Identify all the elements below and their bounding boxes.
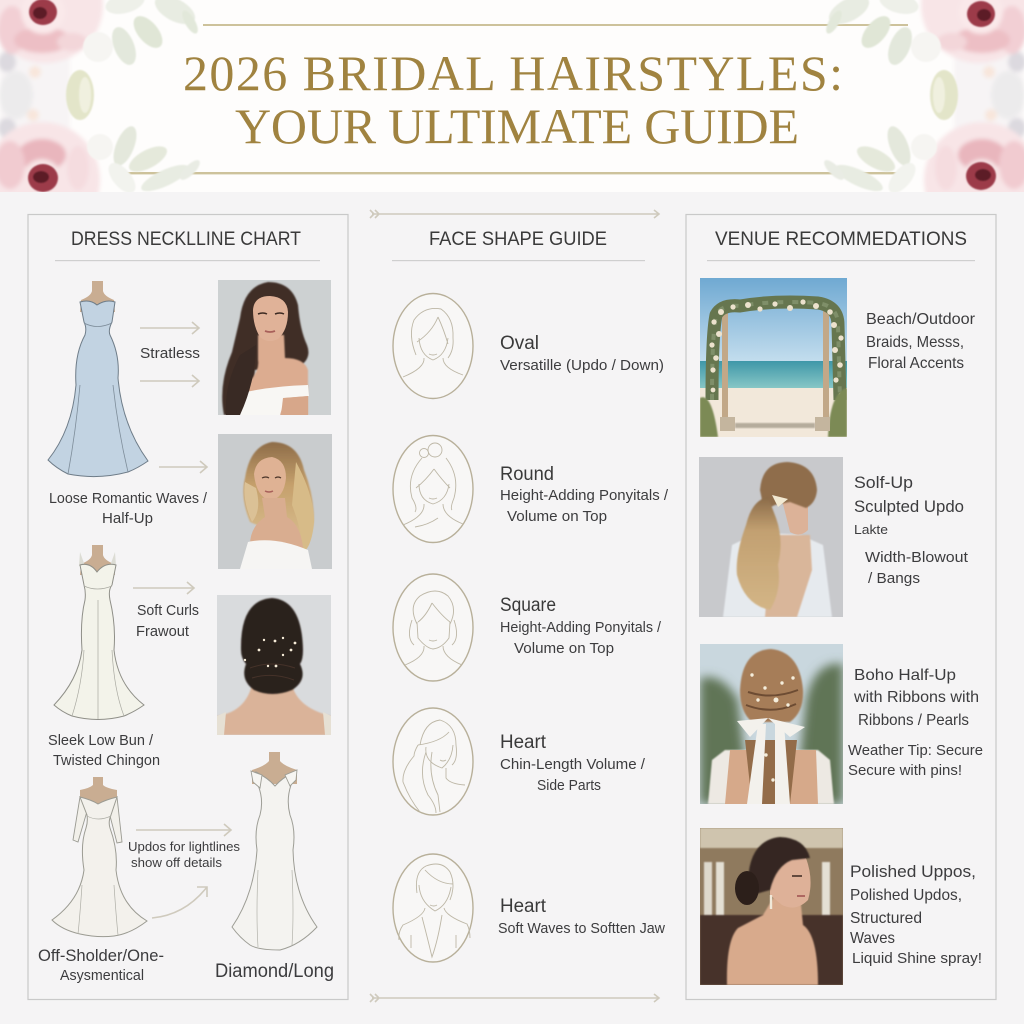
label: beach outdoor bbox=[866, 311, 976, 372]
label: beach outdoor: Beach/Outdoor bbox=[866, 311, 976, 328]
label: soft updo: Width-Blowout bbox=[865, 549, 969, 566]
label: soft curls bbox=[136, 602, 199, 640]
title: 2026 BRIDAL HAIRSTYLES: bbox=[183, 45, 843, 101]
label: round: Round bbox=[500, 464, 554, 485]
label: heart bbox=[500, 732, 646, 794]
dress: blue strapless bbox=[48, 281, 148, 477]
label: boho half-up: Boho Half-Up bbox=[854, 667, 956, 684]
label: sleek low bun: Sleek Low Bun / bbox=[48, 732, 154, 749]
label: off-shoulder: Off-Sholder/One- bbox=[38, 946, 164, 965]
label: square: Volume on Top bbox=[514, 640, 614, 657]
arrow: curved bbox=[152, 887, 207, 918]
arrow: bottom connector bbox=[370, 994, 659, 1002]
label: heart: Chin-Length Volume / bbox=[500, 756, 646, 773]
label: updos for necklines bbox=[128, 839, 241, 870]
label: heart: Heart bbox=[500, 732, 547, 753]
arrow bbox=[140, 322, 199, 334]
panel: face shape guide bbox=[392, 229, 669, 962]
label: oval: Oval bbox=[500, 333, 539, 354]
label: loose romantic waves: Loose Romantic Waves / bbox=[49, 490, 208, 507]
title: YOUR ULTIMATE GUIDE bbox=[235, 98, 799, 154]
label: soft updo bbox=[854, 473, 969, 587]
label: round: Volume on Top bbox=[507, 508, 607, 525]
label: boho half-up bbox=[848, 667, 983, 779]
label: oval bbox=[500, 333, 664, 374]
label: soft curls: Soft Curls bbox=[137, 602, 199, 619]
label: heart: Side Parts bbox=[537, 777, 601, 794]
label: square bbox=[500, 595, 662, 657]
panel: venue recommendations bbox=[686, 214, 996, 1000]
arrow: top connector bbox=[370, 210, 659, 218]
label: polished updos: Polished Uppos, bbox=[850, 862, 976, 881]
label: polished updos: Waves bbox=[850, 930, 895, 947]
photo: dark low bun bbox=[217, 595, 331, 735]
floral corner: left bbox=[0, 0, 200, 192]
label: soft updo: Sculpted Updo bbox=[854, 497, 964, 516]
label: updos for necklines: show off details bbox=[131, 855, 223, 870]
heading: dress neckline chart: DRESS NECKLLINE CHART bbox=[71, 229, 301, 250]
label: beach outdoor: Floral Accents bbox=[868, 355, 964, 372]
icon: round face bbox=[393, 436, 473, 542]
icon: heart face bbox=[393, 708, 473, 815]
dress: off-shoulder long sleeve bbox=[52, 777, 147, 937]
label: updos for necklines: Updos for lightlines bbox=[128, 839, 241, 854]
photo: blonde waves bbox=[218, 434, 332, 569]
dress: sweetheart straps bbox=[54, 545, 144, 720]
icon: square face bbox=[393, 574, 473, 681]
label: soft updo: Solf-Up bbox=[854, 473, 913, 492]
photo: ponytail bbox=[699, 457, 843, 617]
label: polished updos: Polished Updos, bbox=[850, 887, 962, 904]
arrow bbox=[133, 582, 194, 594]
icon: diamond face bbox=[393, 854, 473, 962]
label: soft curls: Frawout bbox=[136, 623, 190, 640]
label: polished updos: Liquid Shine spray! bbox=[852, 950, 982, 967]
title bbox=[185, 57, 839, 144]
label: off-shoulder: Asysmentical bbox=[60, 967, 144, 984]
heading: venue recommendations: VENUE RECOMMEDATIONS bbox=[715, 229, 967, 250]
photo: dark waves bbox=[218, 280, 331, 415]
label: sleek low bun bbox=[48, 732, 160, 769]
arrow bbox=[136, 824, 231, 836]
gold rule bottom bbox=[124, 172, 905, 174]
dress: off-shoulder gown bbox=[232, 752, 317, 950]
label: loose romantic waves: Half-Up bbox=[102, 510, 153, 527]
label: soft updo: Lakte bbox=[854, 522, 888, 537]
label: strapless: Stratless bbox=[140, 345, 200, 362]
label: soft updo: / Bangs bbox=[868, 570, 920, 587]
arrow bbox=[159, 461, 207, 473]
label: heart soft waves bbox=[498, 896, 665, 937]
gold rule top bbox=[203, 24, 908, 26]
label: polished updos: Structured bbox=[850, 910, 922, 927]
floral corner: right bbox=[824, 0, 1024, 192]
label: sleek low bun: Twisted Chingon bbox=[53, 752, 160, 769]
photo: polished updo bbox=[700, 828, 843, 985]
label: boho half-up: Weather Tip: Secure bbox=[848, 742, 983, 759]
label: boho half-up: Ribbons / Pearls bbox=[858, 712, 969, 729]
label: off-shoulder bbox=[38, 946, 164, 984]
label: heart soft waves: Heart bbox=[500, 896, 547, 917]
label: round bbox=[500, 464, 669, 525]
label: beach outdoor: Braids, Messs, bbox=[866, 334, 964, 351]
label: loose romantic waves bbox=[49, 490, 208, 527]
label: diamond/long: Diamond/Long bbox=[215, 961, 334, 982]
photo: boho half-up bbox=[700, 644, 843, 804]
arrow bbox=[140, 375, 199, 387]
label: boho half-up: with Ribbons with bbox=[853, 689, 979, 706]
label: oval: Versatille (Updo / Down) bbox=[500, 357, 664, 374]
label: round: Height-Adding Ponyitals / bbox=[500, 487, 669, 504]
label: square: Height-Adding Ponyitals / bbox=[500, 619, 662, 636]
icon: oval face bbox=[393, 294, 473, 398]
panel: dress neckline chart bbox=[28, 214, 348, 1000]
photo: beach arch bbox=[700, 278, 847, 437]
label: boho half-up: Secure with pins! bbox=[848, 762, 962, 779]
label: polished updos bbox=[850, 862, 982, 967]
label: square: Square bbox=[500, 595, 556, 616]
header banner bbox=[0, 0, 1024, 192]
label: heart soft waves: Soft Waves to Softten Jaw bbox=[498, 920, 665, 937]
heading: face shape guide: FACE SHAPE GUIDE bbox=[429, 229, 607, 250]
